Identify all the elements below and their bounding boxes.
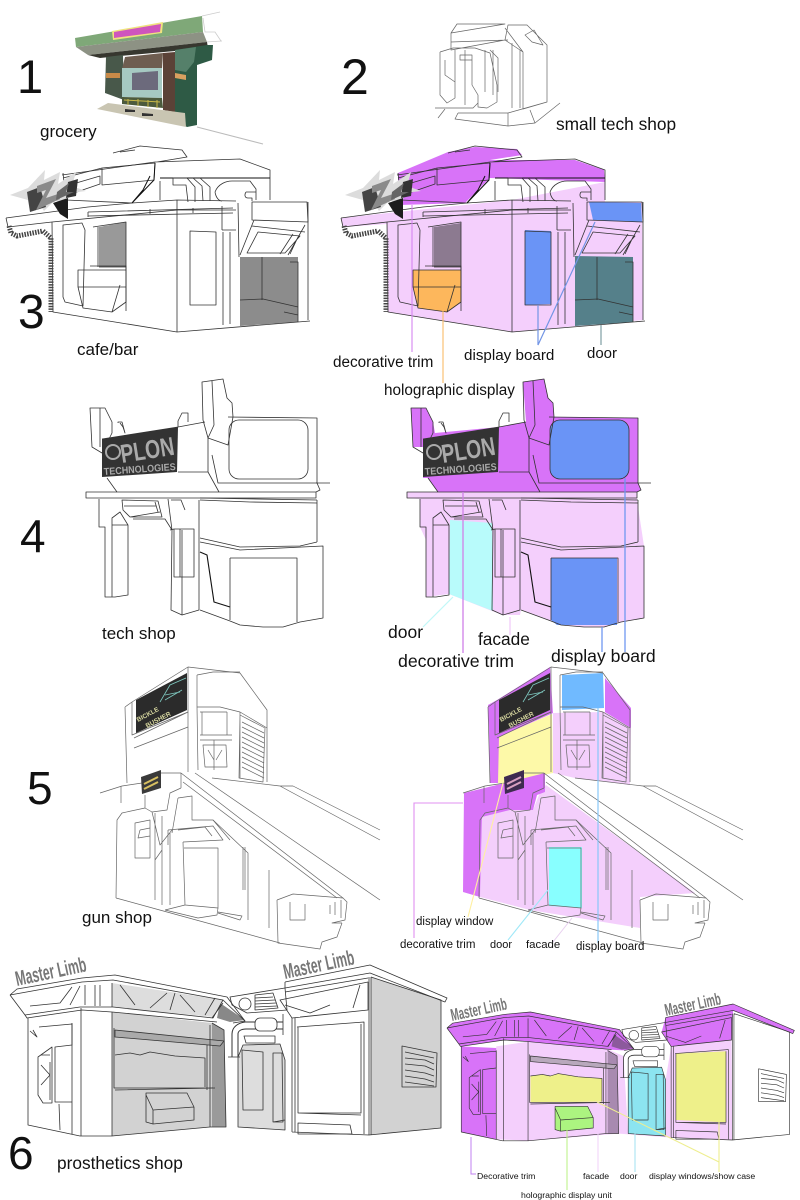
rooftop sign: BICKLE bbox=[499, 706, 524, 724]
leader: door bbox=[634, 1132, 636, 1172]
building linework bbox=[463, 667, 743, 949]
display window fills bbox=[530, 1051, 726, 1122]
sign: PLON bbox=[439, 431, 497, 469]
leader: door bbox=[508, 890, 548, 940]
label: door: door bbox=[587, 345, 617, 362]
label: facade: facade bbox=[583, 1171, 609, 1181]
facade fill bbox=[480, 785, 695, 928]
label: gun shop: gun shop bbox=[82, 908, 152, 927]
number 4: 4 bbox=[20, 510, 46, 562]
display window yellow bbox=[498, 714, 553, 783]
label: holographic display unit: holographic display unit bbox=[521, 1190, 612, 1200]
grocery kiosk painting bbox=[75, 12, 263, 144]
panel 3: cafe/bar colour key bbox=[333, 146, 645, 399]
sign bbox=[102, 427, 178, 478]
label: door: door bbox=[490, 939, 512, 951]
building linework bbox=[341, 146, 645, 332]
decorative trim fill bbox=[398, 147, 605, 205]
window interior bbox=[99, 222, 126, 267]
window fill bbox=[434, 223, 461, 267]
decorative trim fills bbox=[463, 667, 631, 897]
rooftop sign: BICKLE bbox=[136, 706, 161, 724]
leader: display board bbox=[597, 708, 599, 943]
building linework bbox=[86, 379, 330, 627]
dark side bbox=[608, 1050, 619, 1134]
label: facade: facade bbox=[526, 939, 560, 951]
building linework bbox=[6, 146, 310, 332]
panel 6: prosthetics shop line art bbox=[8, 946, 447, 1179]
leader: door bbox=[600, 325, 602, 345]
facade fill bbox=[496, 1040, 732, 1141]
door fill bbox=[628, 1067, 666, 1136]
leader: display windows bbox=[597, 1102, 719, 1172]
facade fill bbox=[407, 492, 644, 627]
number 1: 1 bbox=[17, 50, 43, 103]
leader: door bbox=[423, 597, 453, 627]
label: grocery: grocery bbox=[40, 122, 97, 141]
label: display board: display board bbox=[576, 941, 644, 953]
small sign bbox=[141, 770, 161, 794]
sign: Master Limb right: Master Limb bbox=[663, 989, 723, 1020]
door interior bbox=[240, 257, 298, 326]
number 2: 2 bbox=[341, 49, 369, 105]
label: decorative trim: decorative trim bbox=[398, 651, 514, 671]
leader: facade bbox=[553, 918, 572, 942]
building linework bbox=[407, 379, 651, 627]
leader: display board bbox=[602, 478, 625, 652]
building linework bbox=[447, 1004, 794, 1141]
leader: holographic display bbox=[442, 310, 444, 383]
sign: TECHNOLOGIES bbox=[103, 462, 176, 478]
decorative trim fills bbox=[447, 1004, 794, 1139]
grey wall fills bbox=[112, 977, 441, 1136]
panel 1: grocery bbox=[17, 12, 263, 144]
holographic display fill bbox=[413, 270, 461, 312]
label: small tech shop: small tech shop bbox=[556, 114, 676, 134]
door fill bbox=[575, 256, 633, 326]
leader: facade bbox=[597, 1133, 599, 1172]
label: display window: display window bbox=[416, 916, 494, 928]
logo bbox=[345, 170, 421, 219]
rooftop sign: BUSHER bbox=[508, 711, 535, 730]
label: holographic display: holographic display bbox=[384, 382, 515, 399]
label: door: door bbox=[620, 1171, 637, 1181]
gutter pipe bbox=[9, 226, 51, 312]
small sign bbox=[504, 770, 524, 794]
number 3: 3 bbox=[18, 286, 45, 339]
building linework bbox=[10, 965, 447, 1136]
label: tech shop: tech shop bbox=[102, 624, 176, 643]
decorative trim fill bbox=[411, 379, 641, 492]
door fill bbox=[549, 847, 582, 908]
sign bbox=[423, 427, 499, 478]
sign: Master Limb left: Master Limb bbox=[13, 953, 88, 991]
leader: display board bbox=[538, 222, 595, 345]
leader: display window bbox=[468, 783, 503, 917]
awning bbox=[530, 1056, 617, 1069]
sign: TECHNOLOGIES bbox=[424, 462, 497, 478]
leader: decorative trim bbox=[462, 492, 464, 653]
building linework bbox=[100, 667, 380, 949]
label: decorative trim: decorative trim bbox=[400, 939, 475, 951]
display board fills bbox=[550, 420, 629, 625]
label: decorative trim: Decorative trim bbox=[477, 1171, 535, 1181]
gutter pipe bbox=[344, 226, 386, 312]
sign: Master Limb right: Master Limb bbox=[281, 946, 356, 984]
label: door: door bbox=[388, 622, 423, 642]
logo bbox=[10, 170, 86, 219]
panel 6: prosthetics shop colour key bbox=[447, 989, 794, 1200]
leader: decorative trim bbox=[414, 803, 463, 938]
sign: Master Limb left: Master Limb bbox=[449, 994, 509, 1025]
panel 3: cafe/bar line art bbox=[6, 146, 310, 359]
holographic unit fill bbox=[555, 1106, 593, 1131]
leader: holographic display unit bbox=[566, 1130, 568, 1190]
coloured building bbox=[447, 1004, 794, 1141]
sign: PLON bbox=[118, 431, 176, 469]
panel 4: tech shop colour key bbox=[388, 379, 656, 671]
leader: decorative trim bbox=[411, 205, 413, 352]
label: cafe/bar: cafe/bar bbox=[77, 340, 139, 359]
tower facade fill bbox=[553, 712, 631, 785]
label: display board: display board bbox=[551, 646, 656, 666]
label: decorative trim: decorative trim bbox=[333, 354, 433, 371]
door fill bbox=[449, 520, 493, 611]
small tech shop line drawing bbox=[435, 24, 560, 126]
label: display board: display board bbox=[464, 347, 554, 364]
panel 5: gun shop line art bbox=[27, 667, 380, 949]
facade fill bbox=[341, 182, 643, 332]
number 6: 6 bbox=[8, 1127, 34, 1179]
rooftop sign bbox=[499, 673, 550, 733]
panel 5: gun shop colour key bbox=[400, 667, 743, 953]
label: facade: facade bbox=[478, 629, 530, 649]
display board fills bbox=[525, 202, 642, 305]
rooftop sign: BUSHER bbox=[145, 711, 172, 730]
panel 2: small tech shop bbox=[341, 24, 676, 134]
leader: decorative trim bbox=[471, 1137, 476, 1174]
label: prosthetics shop: prosthetics shop bbox=[57, 1153, 183, 1173]
rooftop sign bbox=[136, 673, 187, 733]
display board fill bbox=[562, 673, 604, 710]
panel 4: tech shop line art bbox=[20, 379, 330, 643]
label: display windows/show case: display windows/show case bbox=[649, 1171, 755, 1181]
leader: facade bbox=[509, 617, 511, 635]
number 5: 5 bbox=[27, 762, 53, 814]
